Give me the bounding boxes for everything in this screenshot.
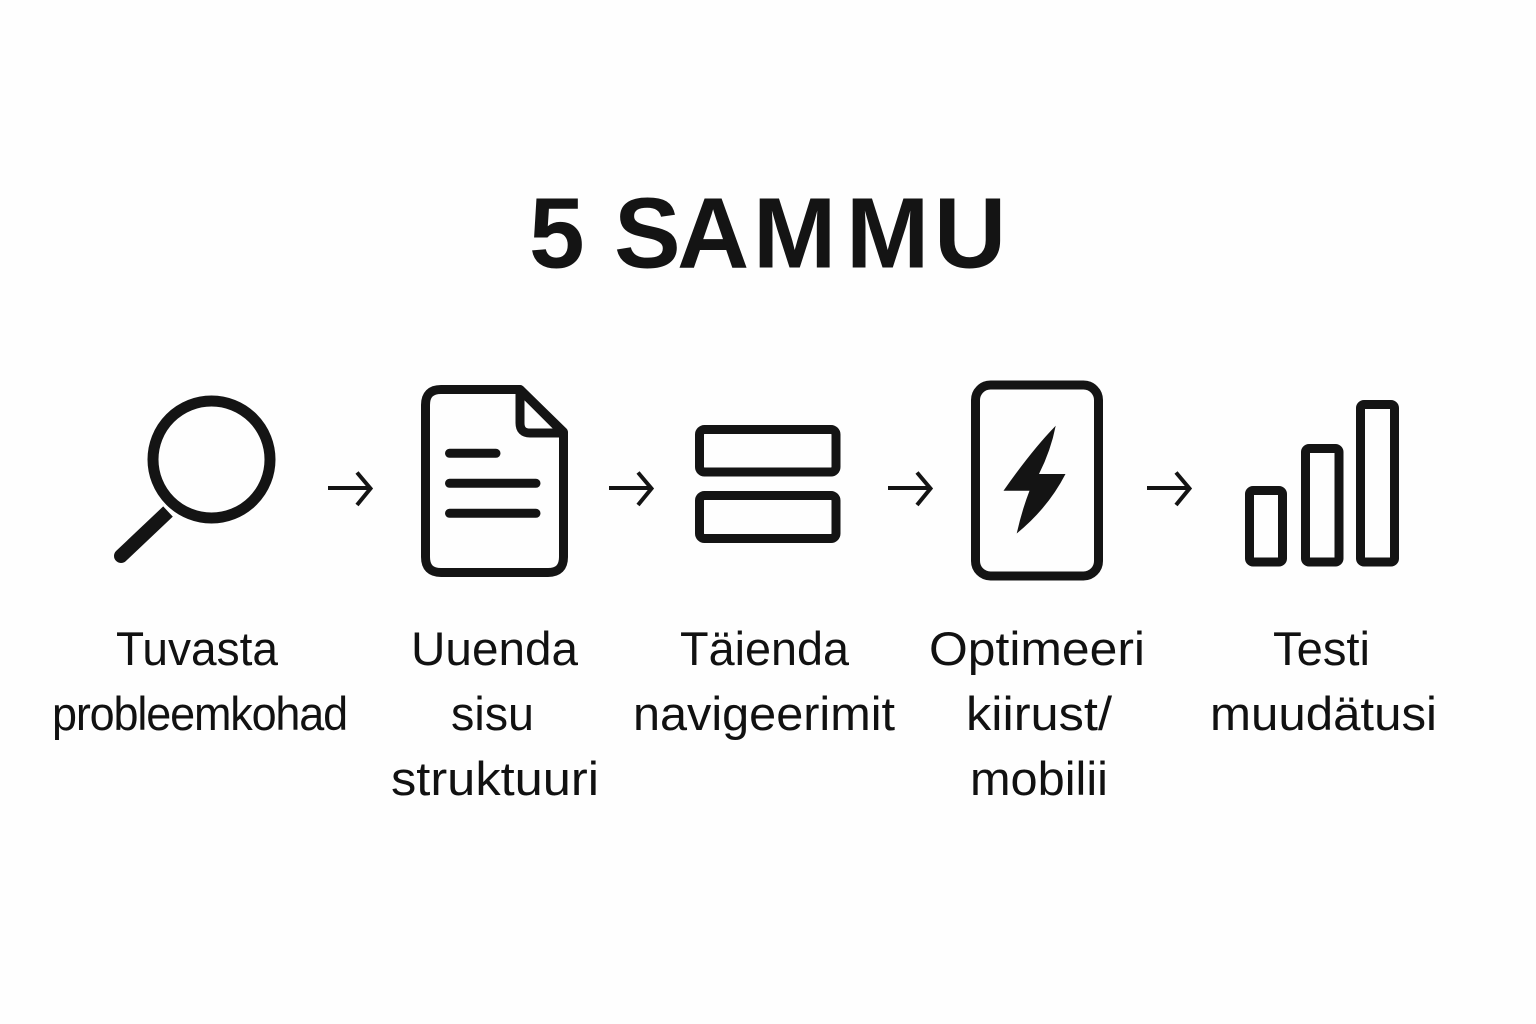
icon: magnifying glass — [114, 401, 270, 563]
label: step 2: sisu — [451, 687, 534, 740]
label: step 2 — [391, 622, 599, 805]
icon: navigation bars — [700, 430, 836, 538]
arrow 3 — [888, 472, 930, 505]
label: step 3: navigeerimit — [633, 687, 895, 740]
label: step 5 — [1210, 622, 1437, 740]
arrow 4 — [1147, 472, 1190, 505]
arrow 2 — [609, 472, 652, 505]
label: step 1 — [52, 622, 347, 740]
label: step 4: kiirust/ — [966, 687, 1113, 740]
label: step 4: mobilii — [970, 752, 1108, 805]
label: step 2: Uuenda — [411, 622, 579, 675]
label: step 3: Täienda — [680, 622, 850, 675]
label: step 5: muudätusi — [1210, 687, 1437, 740]
arrow 1 — [328, 472, 370, 505]
title: 5 SAMMU — [529, 178, 1006, 290]
label: step 3 — [633, 622, 895, 740]
icon: phone with lightning bolt — [976, 385, 1098, 576]
label: step 4: Optimeeri — [929, 622, 1145, 675]
label: step 4 — [929, 622, 1145, 805]
icon: document — [426, 390, 564, 572]
label: step 2: struktuuri — [391, 752, 599, 805]
label: step 1: Tuvasta — [116, 622, 279, 675]
label: step 1: probleemkohad — [52, 687, 347, 740]
icon: bar chart — [1250, 404, 1394, 562]
label: step 5: Testi — [1273, 622, 1370, 675]
